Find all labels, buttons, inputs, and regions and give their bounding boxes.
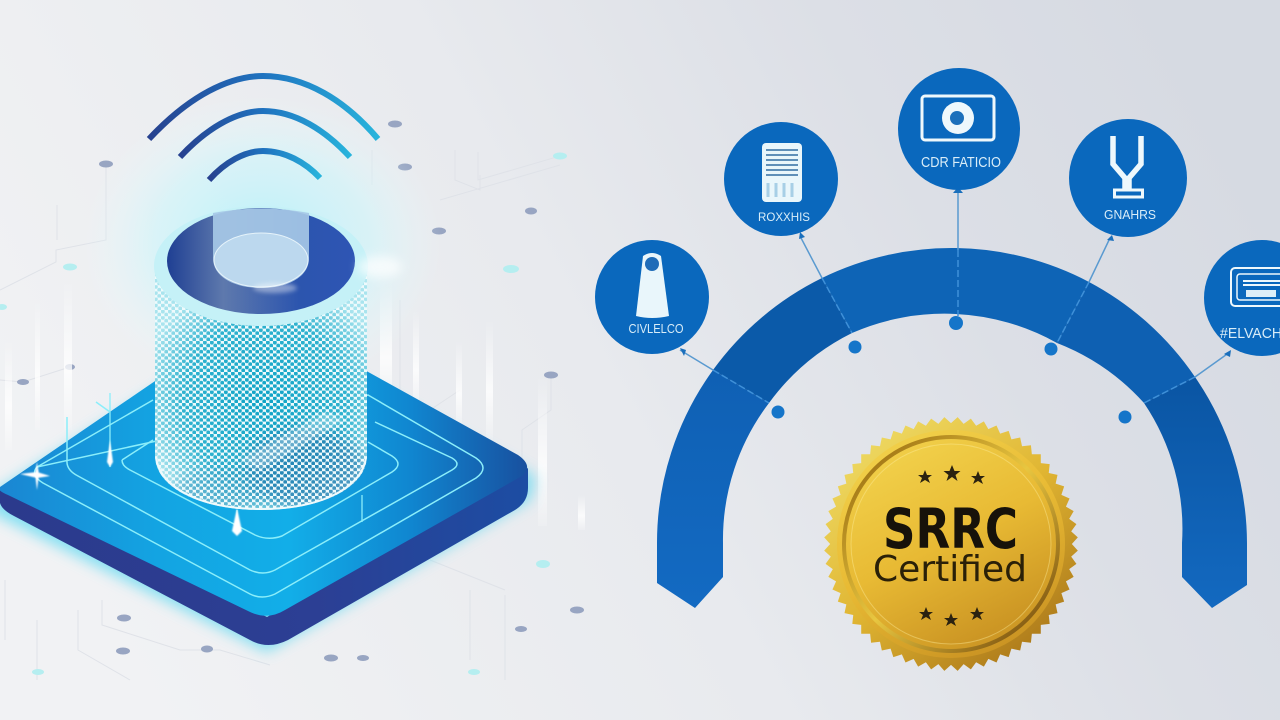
connector end nodes bbox=[680, 187, 1231, 424]
seal subtitle: Certified bbox=[873, 549, 1027, 590]
cylinder mesh bbox=[155, 270, 367, 510]
node: upper left: ROXXHIS bbox=[758, 210, 810, 224]
platform sparkles bbox=[20, 440, 242, 536]
connector lines bbox=[680, 190, 1230, 403]
icon: antenna fork bbox=[1113, 136, 1142, 197]
platform circuit rings bbox=[35, 393, 483, 597]
node: upper right bbox=[1069, 119, 1187, 237]
speaker rim bbox=[154, 206, 368, 326]
background circuit traces bbox=[0, 150, 560, 680]
seal stars bottom bbox=[919, 607, 984, 626]
isometric platform bbox=[0, 316, 528, 645]
icon: tower device bbox=[636, 253, 669, 318]
platform top face bbox=[0, 316, 527, 616]
translucent core bbox=[213, 208, 309, 293]
node: right bbox=[1204, 240, 1280, 356]
arch centre segment bbox=[822, 248, 1089, 343]
node: top centre: CDR FATICIO bbox=[921, 155, 1001, 171]
cylinder base rim bbox=[156, 457, 366, 509]
light beams behind the platform bbox=[5, 280, 585, 530]
arch end segment right bbox=[1144, 377, 1247, 608]
seal outer band bbox=[837, 430, 1065, 658]
wifi signal arcs bbox=[149, 76, 378, 180]
seal title: SRRC bbox=[883, 497, 1018, 561]
node: top centre bbox=[898, 68, 1020, 190]
seal stars top bbox=[918, 465, 985, 484]
cylinder shading bbox=[175, 412, 365, 512]
background circuit nodes bbox=[0, 120, 584, 675]
node: upper right: GNAHRS bbox=[1104, 208, 1156, 222]
icon: document card bbox=[762, 143, 802, 202]
seal rings bbox=[844, 437, 1058, 651]
speaker dark top bbox=[167, 208, 355, 314]
arch upper right segment bbox=[1057, 282, 1195, 403]
node: upper left bbox=[724, 122, 838, 236]
highlight flare bbox=[358, 256, 402, 278]
arch end segment left bbox=[657, 370, 769, 608]
arch upper left segment bbox=[713, 278, 852, 403]
platform side bbox=[0, 468, 528, 645]
arch gauge bbox=[657, 248, 1247, 608]
node: left: CIVLELCO bbox=[628, 321, 684, 336]
node: left bbox=[595, 240, 709, 354]
icon: screen with emblem bbox=[922, 96, 994, 140]
mesh speaker cylinder bbox=[154, 206, 368, 512]
seal serrated edge bbox=[821, 414, 1081, 674]
icon: chip label bbox=[1231, 268, 1280, 306]
certification seal bbox=[821, 414, 1081, 674]
platform glow bbox=[0, 325, 535, 652]
cylinder body bbox=[155, 270, 367, 510]
speaker glow bbox=[82, 95, 442, 395]
